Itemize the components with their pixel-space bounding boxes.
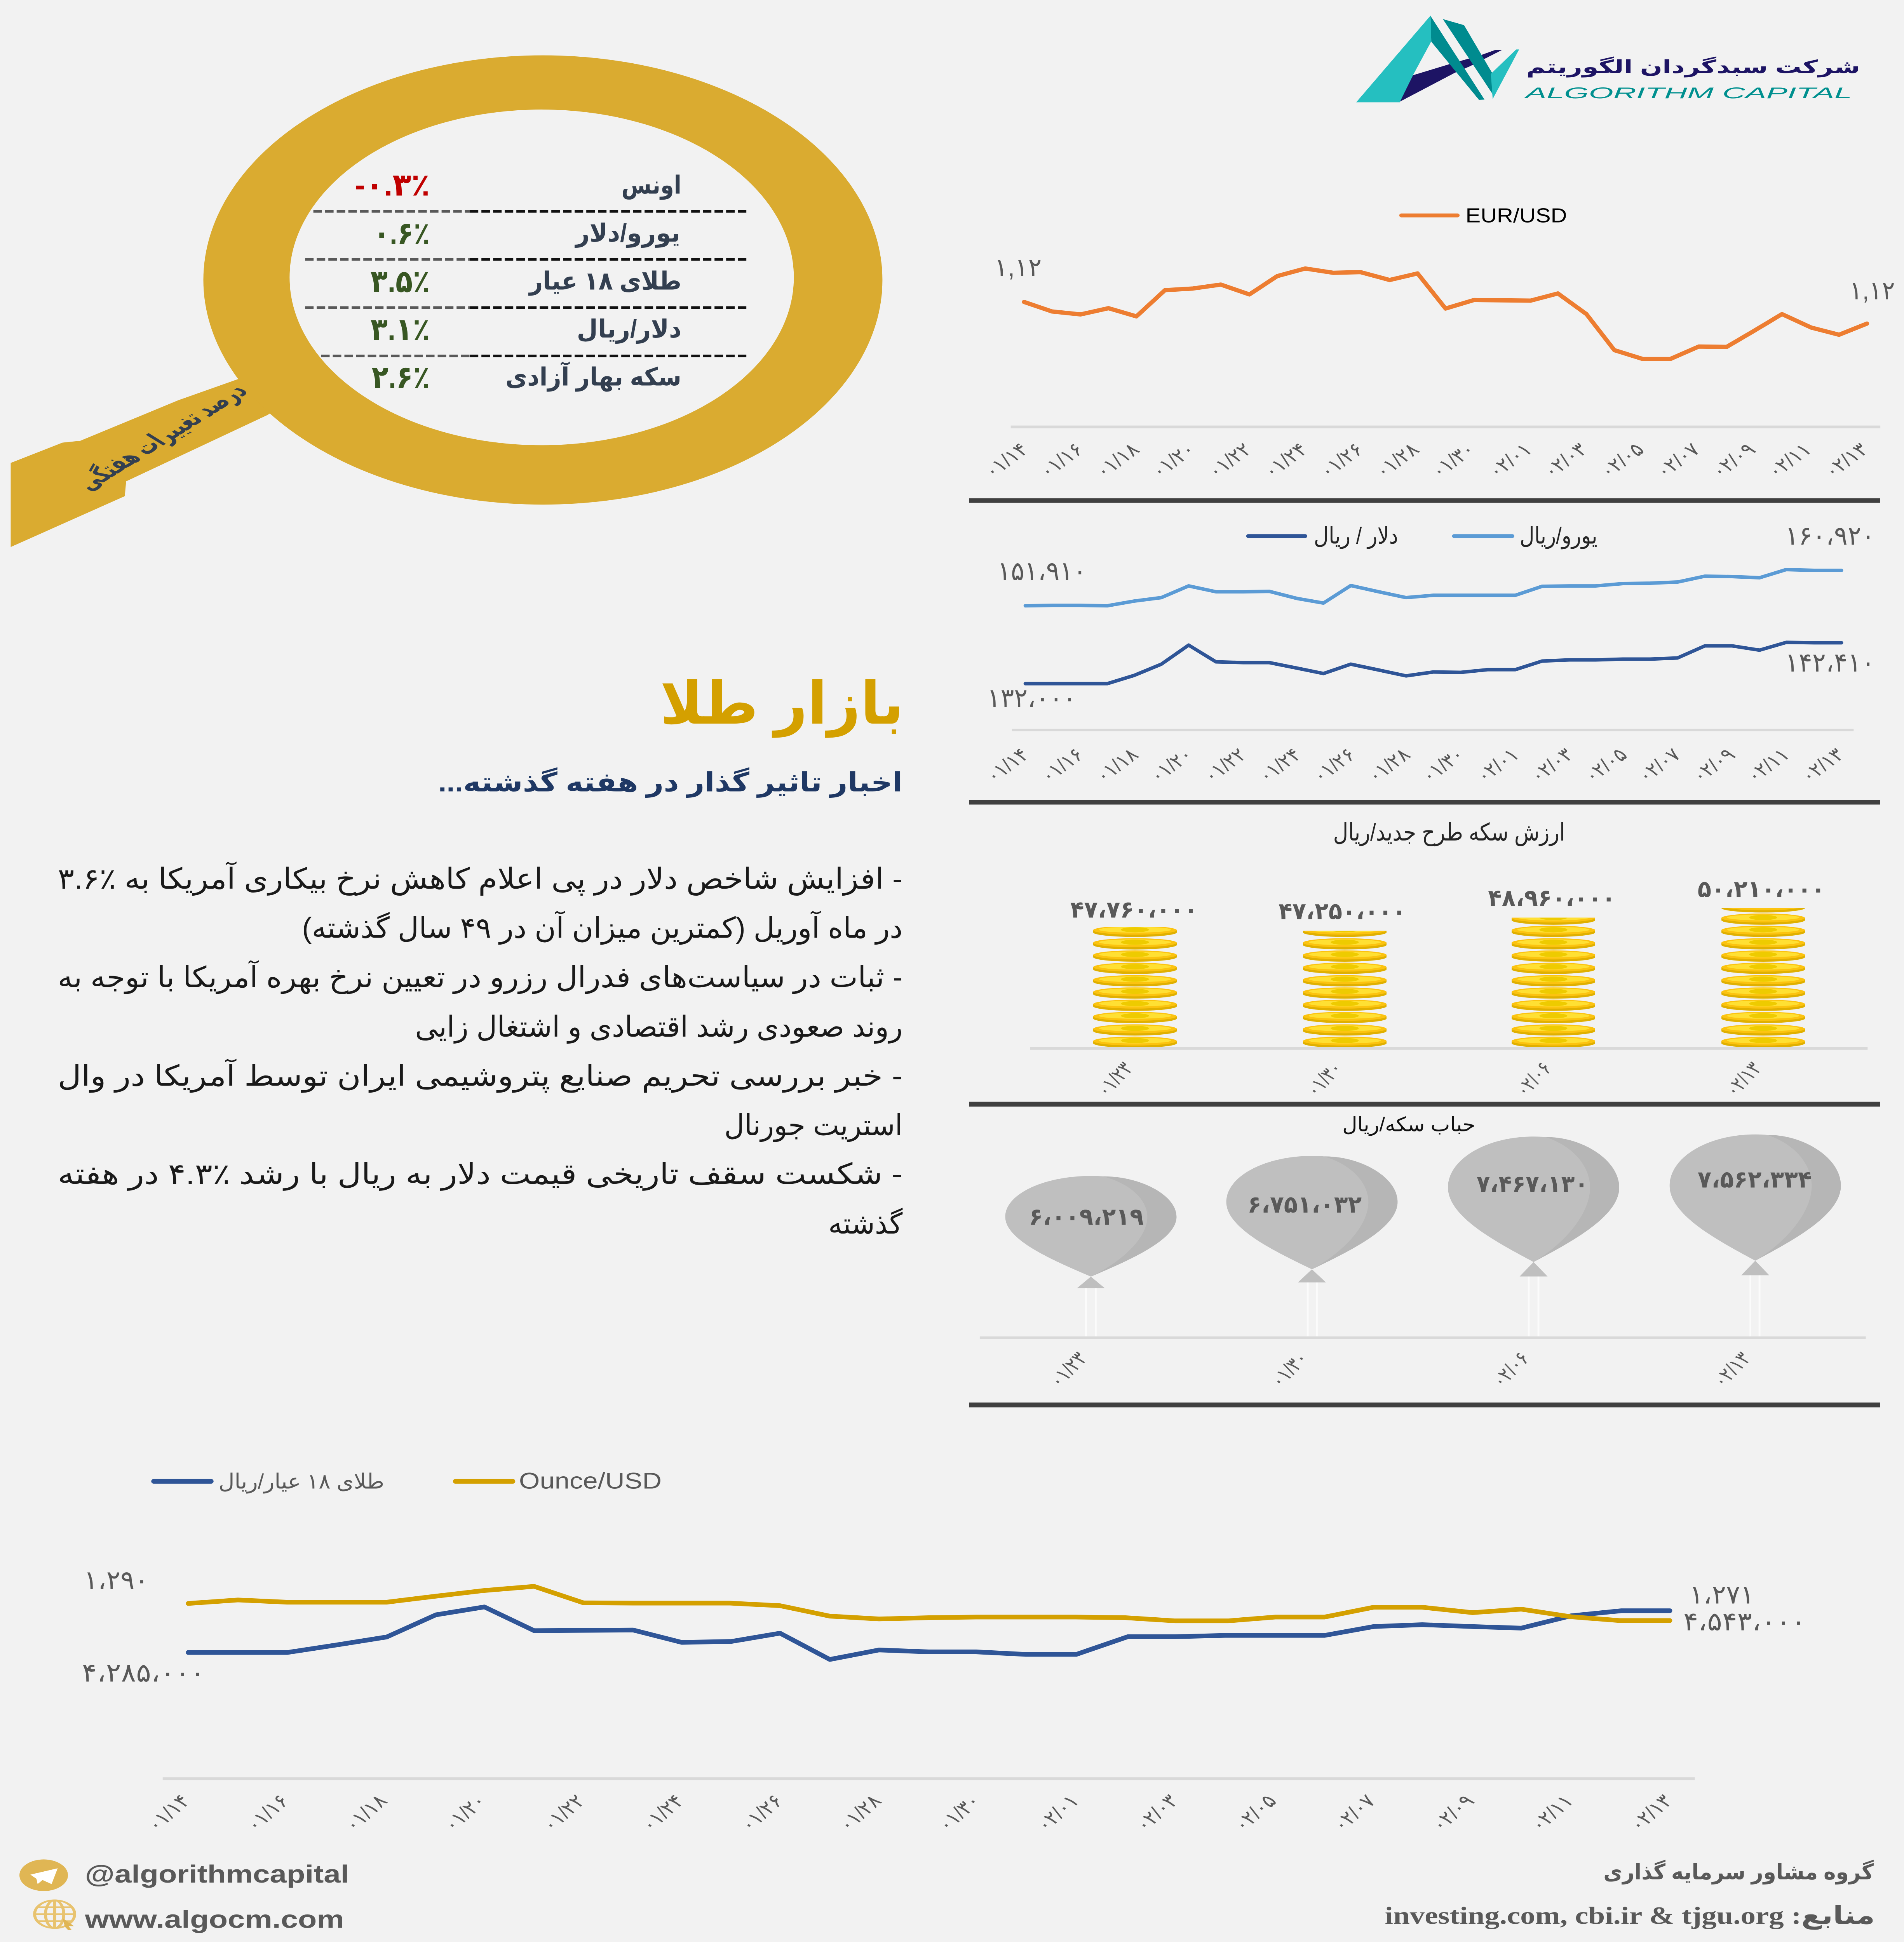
body text: - شکست سقف تاریخی قیمت دلار به ریال با رشد ٪۴.۳ در هفته	[57, 1158, 902, 1191]
coin chart labels: ۵۰،۲۱۰،۰۰۰	[1698, 876, 1825, 902]
gold 18k series	[188, 1607, 1670, 1660]
balloon date labels: ۰۲/۱۳	[1707, 1348, 1756, 1391]
coin stack 1	[1093, 927, 1177, 1047]
gold chart date labels: ۰۲/۰۷	[1328, 1791, 1380, 1835]
chart: EUR/USD line	[994, 205, 1895, 427]
row percentages: ۰.۶٪	[373, 216, 430, 251]
dollar/euro date axis labels: ۰۲/۰۷	[1633, 744, 1686, 787]
EUR/USD date axis labels: ۰۲/۰۳	[1538, 439, 1592, 482]
gold chart date labels: ۰۱/۲۲	[537, 1791, 590, 1835]
dollar/euro date axis labels: ۰۲/۱۱	[1742, 744, 1794, 787]
legend: طلای ۱۸ عیار/ریال	[218, 1470, 384, 1494]
website: www.algocm.com	[85, 1905, 344, 1933]
row labels	[505, 171, 681, 392]
icon: telegram	[19, 1859, 68, 1891]
coin stack 4	[1721, 901, 1805, 1048]
dollar/euro date axis labels: ۰۲/۱۳	[1796, 744, 1849, 787]
balloon 4	[1670, 1135, 1841, 1275]
EUR/USD date axis labels: ۰۱/۳۰	[1426, 439, 1480, 482]
balloon strings	[1086, 1276, 1759, 1336]
balloon 2	[1226, 1156, 1397, 1282]
balloon date labels: ۰۱/۲۳	[1044, 1348, 1092, 1391]
dollar/rial series	[1025, 642, 1841, 684]
legend	[1248, 522, 1597, 550]
footer: contact details	[19, 1859, 349, 1933]
chart: dollar and euro vs rial lines	[987, 520, 1875, 730]
gold chart date labels: ۰۱/۱۸	[340, 1791, 392, 1835]
axis line	[1011, 426, 1880, 428]
EUR/USD date axis labels: ۰۲/۰۹	[1707, 439, 1760, 482]
body text: - خبر بررسی تحریم صنایع پتروشیمی ایران توسط آمریکا در وال	[57, 1058, 902, 1093]
EUR/USD date axis labels: ۰۱/۲۴	[1259, 439, 1312, 482]
coin date labels: ۰۲/۱۳	[1720, 1058, 1767, 1100]
row percentages: ۳.۵٪	[371, 264, 430, 299]
legend: دلار / ریال	[1314, 522, 1398, 549]
EUR/USD date axis labels: ۰۱/۱۴	[979, 439, 1033, 482]
balloon date labels: ۰۱/۳۰	[1265, 1348, 1313, 1391]
coin date labels: ۰۱/۳۰	[1301, 1058, 1348, 1100]
gold chart date labels	[142, 1791, 1677, 1835]
EUR/USD date axis labels: ۰۱/۲۸	[1370, 439, 1424, 482]
dollar/euro date axis labels: ۰۲/۰۹	[1687, 744, 1740, 787]
row labels: دلار/ریال	[577, 315, 681, 344]
body text	[57, 861, 903, 1240]
EUR/USD date axis labels: ۰۱/۲۶	[1315, 439, 1368, 482]
coin chart labels	[1030, 819, 1867, 1048]
gold chart date labels: ۰۲/۱۱	[1526, 1791, 1578, 1835]
gold chart date labels: ۰۱/۱۴	[142, 1791, 195, 1835]
row percentages: ۲.۶٪	[372, 360, 430, 395]
dollar/euro date axis labels: ۰۲/۰۵	[1579, 744, 1632, 787]
row percentages: -۰.۳٪	[355, 167, 430, 202]
coin chart labels: ارزش سکه طرح جدید/ریال	[1333, 819, 1565, 846]
footer: sources	[1385, 1860, 1875, 1930]
value labels: ۱،۲۷۱	[1689, 1580, 1754, 1609]
dollar/euro date axis labels: ۰۱/۱۸	[1090, 744, 1143, 787]
balloon date labels	[1044, 1348, 1756, 1391]
row labels: یورو/دلار	[575, 219, 680, 248]
dollar/euro date axis labels: ۰۱/۲۰	[1145, 744, 1198, 787]
axis line	[980, 1336, 1866, 1339]
body text: - افزایش شاخص دلار در پی اعلام کاهش نرخ بیکاری آمریکا به ٪۳.۶	[57, 861, 902, 896]
balloon values: ۷،۴۶۷،۱۳۰	[1477, 1171, 1588, 1197]
EUR/USD date axis labels: ۰۱/۱۸	[1090, 439, 1144, 482]
value labels	[82, 1566, 1806, 1687]
magnifier ring	[203, 55, 882, 505]
body text: گذشته	[828, 1208, 903, 1240]
EUR/USD date axis labels: ۰۲/۰۷	[1651, 439, 1705, 482]
icon: globe	[35, 1900, 75, 1930]
body text: در ماه آوریل (کمترین میزان آن در ۴۹ سال گذشته)	[302, 910, 902, 945]
row percentages: ۳.۱٪	[371, 312, 430, 347]
balloon values	[1029, 1166, 1812, 1230]
gold chart date labels: ۰۲/۰۱	[1031, 1791, 1084, 1835]
EUR/USD date axis labels	[979, 439, 1873, 482]
legend	[153, 1468, 662, 1494]
body text: استریت جورنال	[724, 1109, 902, 1142]
legend: Ounce/USD	[519, 1468, 662, 1494]
value labels	[987, 520, 1875, 713]
magnifier handle	[11, 379, 309, 547]
gold chart date labels: ۰۲/۰۳	[1131, 1791, 1183, 1835]
chart: coin bubble balloons: حباب سکه/ریال	[1342, 1113, 1475, 1136]
row labels: طلای ۱۸ عیار	[528, 267, 681, 296]
dollar/euro date axis labels: ۰۱/۲۴	[1253, 744, 1306, 787]
gold chart date labels: ۰۱/۲۸	[834, 1791, 886, 1835]
balloon date labels: ۰۲/۰۶	[1486, 1348, 1535, 1391]
EUR/USD date axis labels: ۰۲/۱۳	[1819, 439, 1873, 482]
dollar/euro date axis labels	[981, 744, 1849, 787]
gold chart date labels: ۰۲/۰۵	[1229, 1791, 1281, 1835]
EUR/USD date axis labels: ۰۱/۱۶	[1035, 439, 1088, 482]
EUR/USD date axis labels: ۰۲/۰۵	[1595, 439, 1649, 482]
ounce series	[188, 1586, 1670, 1621]
dollar/euro date axis labels: ۰۲/۰۳	[1525, 744, 1578, 787]
value labels: ۱۳۲،۰۰۰	[987, 683, 1076, 713]
chart: coin stacks	[1030, 819, 1867, 1100]
handle label: درصد تغییرات هفتگی	[68, 379, 254, 495]
EUR/USD series	[1024, 268, 1867, 359]
legend: یورو/ریال	[1520, 522, 1597, 550]
EUR/USD date axis labels: ۰۲/۱۱	[1763, 439, 1816, 482]
body text: - ثبات در سیاست‌های فدرال رزرو در تعیین نرخ بهره آمریکا با توجه به	[57, 960, 902, 994]
dollar/euro date axis labels: ۰۲/۰۱	[1471, 744, 1524, 787]
value labels: ۱۵۱،۹۱۰	[997, 556, 1087, 586]
coin chart labels: ۴۷،۷۶۰،۰۰۰	[1070, 896, 1198, 923]
dollar/euro date axis labels: ۰۱/۱۴	[981, 744, 1034, 787]
balloon 1	[1005, 1176, 1176, 1288]
gold chart date labels: ۰۱/۲۴	[636, 1791, 689, 1835]
dollar/euro date axis labels: ۰۱/۳۰	[1416, 744, 1469, 787]
euro/rial series	[1025, 569, 1841, 606]
EUR/USD date axis labels: ۰۱/۲۲	[1203, 439, 1256, 482]
gold chart date labels: ۰۱/۱۶	[241, 1791, 294, 1835]
axis line	[163, 1777, 1695, 1780]
row labels: سکه بهار آزادی	[505, 362, 681, 392]
logo: Algorithm Capital	[1356, 16, 1860, 102]
EUR/USD date axis labels: ۰۱/۲۰	[1146, 439, 1200, 482]
value labels: ۴،۵۴۳،۰۰۰	[1683, 1607, 1806, 1636]
balloon values: ۶،۰۰۹،۲۱۹	[1029, 1204, 1144, 1230]
chart: gold 18k and ounce lines	[82, 1468, 1806, 1779]
balloon 3	[1448, 1136, 1619, 1277]
value labels: ۱،۲۹۰	[84, 1566, 149, 1594]
panel: magnifier weekly change table	[11, 55, 882, 547]
chart: coin bubble balloons	[980, 1113, 1866, 1338]
dollar/euro date axis labels: ۰۱/۲۶	[1308, 744, 1360, 787]
magnifier lens	[289, 110, 794, 445]
coin date labels	[1091, 1058, 1767, 1100]
coin chart labels: ۴۸،۹۶۰،۰۰۰	[1488, 885, 1616, 911]
gold chart date labels: ۰۱/۳۰	[933, 1791, 985, 1835]
value labels: ۴،۲۸۵،۰۰۰	[82, 1658, 205, 1687]
dollar/euro date axis labels: ۰۱/۱۶	[1036, 744, 1089, 787]
body text: روند صعودی رشد اقتصادی و اشتغال زایی	[415, 1011, 902, 1044]
row percentages	[355, 167, 430, 395]
dollar/euro date axis labels: ۰۱/۲۸	[1362, 744, 1415, 787]
value labels	[994, 253, 1895, 305]
coin chart labels: ۴۷،۲۵۰،۰۰۰	[1279, 898, 1406, 924]
panel: gold market news text	[57, 671, 904, 1240]
coin stack 3	[1512, 901, 1595, 1048]
dashed row dividers	[305, 211, 747, 356]
gold chart date labels: ۰۲/۰۹	[1427, 1791, 1479, 1835]
coin date labels: ۰۱/۲۳	[1091, 1058, 1138, 1100]
dollar/euro date axis labels: ۰۱/۲۲	[1198, 744, 1251, 787]
EUR/USD date axis labels: ۰۲/۰۱	[1483, 439, 1537, 482]
gold chart date labels: ۰۱/۲۰	[439, 1791, 491, 1835]
subheading: اخبار تاثیر گذار در هفته گذشته...	[438, 767, 902, 798]
gold chart date labels: ۰۲/۱۳	[1625, 1791, 1677, 1835]
heading: بازار طلا	[660, 671, 904, 738]
legend: EUR/USD	[1465, 205, 1567, 227]
axis line	[1012, 729, 1853, 731]
coin date labels: ۰۲/۰۶	[1510, 1058, 1557, 1100]
telegram handle: @algorithmcapital	[85, 1860, 349, 1888]
value labels: ۱,۱۲	[994, 253, 1042, 282]
balloon values: ۶،۷۵۱،۰۳۲	[1247, 1191, 1362, 1218]
row labels: اونس	[621, 171, 681, 200]
gold chart date labels: ۰۱/۲۶	[735, 1791, 788, 1835]
coin stack 2	[1303, 931, 1387, 1047]
